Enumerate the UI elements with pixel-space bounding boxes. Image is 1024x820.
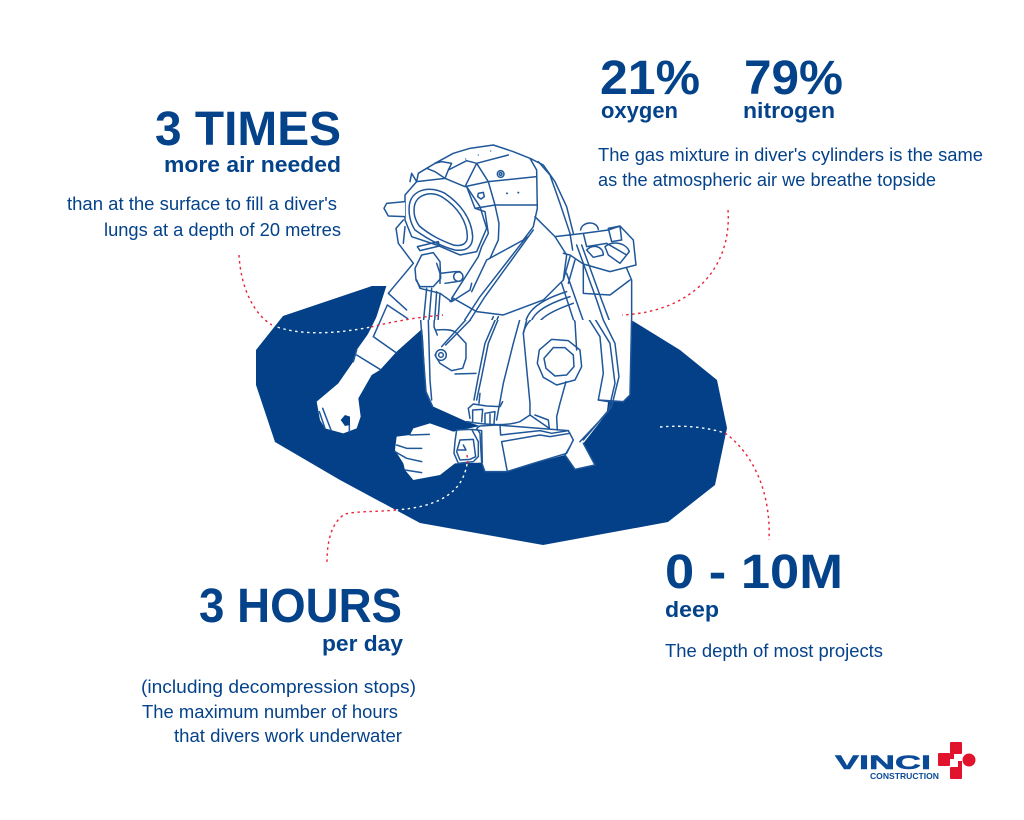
text block: gas mixture: as the atmospheric air we breathe topside bbox=[598, 170, 936, 190]
text block: gas mixture bbox=[598, 145, 983, 190]
text block: oxygen: oxygen bbox=[601, 98, 678, 123]
dashed leader: depth bbox=[660, 426, 769, 540]
logo: red cross bbox=[938, 742, 976, 779]
text block: 3 times: 3 TIMES bbox=[155, 103, 341, 156]
text block: 3 hours bbox=[141, 580, 416, 746]
text block: depth: 0 - 10M bbox=[665, 546, 843, 599]
text block: 3 times: more air needed bbox=[164, 152, 341, 177]
text block: 3 times: lungs at a depth of 20 metres bbox=[104, 220, 341, 240]
text block: depth bbox=[665, 546, 883, 661]
text block: depth: deep bbox=[665, 597, 719, 622]
air valve and hoses bbox=[555, 223, 636, 272]
text block: 3 times bbox=[67, 103, 341, 240]
lower hand and sleeve bbox=[477, 425, 573, 472]
text block: 3 hours: per day bbox=[322, 631, 404, 656]
diver: lower body, arms and tank bbox=[319, 297, 632, 473]
dashed leader: gas mixture bbox=[622, 210, 728, 315]
text block: 3 hours: The maximum number of hours bbox=[142, 702, 398, 722]
diver: white silhouette bbox=[317, 145, 636, 480]
blue water hole shape bbox=[256, 286, 727, 545]
upper fist details bbox=[319, 408, 349, 432]
text block: 3 times: than at the surface to fill a diver's bbox=[67, 194, 337, 214]
text block: gas mixture: The gas mixture in diver's cylinders is the same bbox=[598, 145, 983, 165]
text block: nitrogen: nitrogen bbox=[743, 98, 835, 123]
text block: oxygen: 21% bbox=[600, 52, 700, 105]
dashed leader: air needed bbox=[239, 255, 443, 333]
text block: nitrogen: 79% bbox=[744, 52, 843, 105]
logo: VINCI Construction bbox=[835, 742, 976, 781]
text block: depth: The depth of most projects bbox=[665, 641, 883, 661]
diver illustration bbox=[317, 145, 636, 480]
text block: 3 hours: that divers work underwater bbox=[174, 726, 402, 746]
dashed leader: hours bbox=[327, 455, 468, 562]
helmet rivets bbox=[478, 192, 484, 199]
text block: 3 hours: (including decompression stops) bbox=[141, 677, 416, 697]
mask frame bbox=[405, 178, 487, 255]
logo: VINCI Construction: VINCI bbox=[835, 753, 931, 774]
text block: 3 hours: 3 HOURS bbox=[199, 580, 402, 633]
diver: helmet and valve bbox=[384, 145, 636, 340]
logo: VINCI Construction: CONSTRUCTION bbox=[870, 771, 939, 781]
